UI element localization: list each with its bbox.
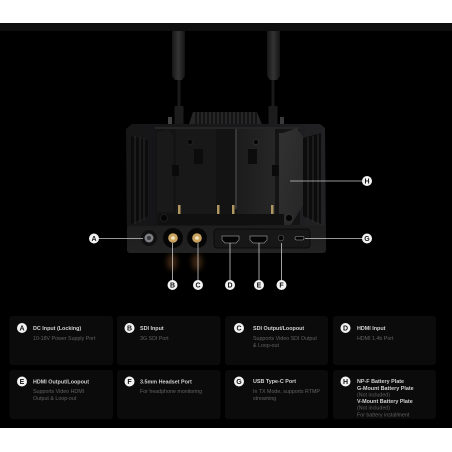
callout E: E — [257, 282, 262, 290]
panel: SDI output: Supports Video SDI Output — [253, 336, 317, 342]
panel: SDI input — [117, 316, 220, 365]
panel: DC input: DC Input (Locking) — [33, 326, 81, 332]
reflection below device — [167, 254, 202, 270]
port panel — [214, 229, 310, 248]
panel: SDI output: & Loop-out — [253, 343, 279, 349]
callout F — [276, 280, 286, 290]
callout G — [362, 234, 372, 244]
gold pins — [178, 205, 274, 214]
callout B: B — [170, 282, 175, 290]
callout D: D — [227, 282, 233, 290]
headset port F — [278, 235, 284, 241]
panel: USB-C port: G — [236, 379, 242, 386]
battery plate — [155, 127, 303, 225]
panel: HDMI input: D — [343, 326, 348, 332]
panel: SDI output: SDI Output/Loopout — [253, 326, 304, 332]
heat sink top — [188, 112, 263, 127]
callouts — [89, 176, 372, 290]
callout C: C — [195, 282, 201, 290]
panel: HDMI input — [333, 316, 436, 365]
icon: left antenna — [172, 31, 185, 126]
panel: headset port: 3.5mm Headset Port — [140, 380, 192, 386]
HDMI port D — [222, 236, 239, 243]
panel: HDMI output: Supports Video HDMI — [33, 389, 84, 395]
panel: HDMI input: HDMI Input — [357, 326, 386, 332]
panel: HDMI output: HDMI Output/Loopout — [33, 380, 89, 386]
panel: SDI input: 3G SDI Port — [140, 336, 169, 342]
callout H: H — [364, 178, 370, 186]
panel: USB-C port: streaming — [253, 396, 276, 402]
DC input port — [141, 230, 157, 246]
panel: SDI input: B — [127, 326, 132, 332]
USB-C port G — [295, 236, 304, 240]
callout H — [362, 176, 372, 186]
icon: right antenna — [267, 31, 280, 126]
device product photo — [126, 31, 326, 270]
side vents — [131, 133, 321, 224]
callout E — [254, 280, 264, 290]
panel: headset port: For headphone monitoring — [140, 389, 202, 395]
callout A: A — [91, 236, 97, 243]
panel: HDMI output — [10, 370, 113, 419]
panel: battery plate: (Not included) — [357, 392, 390, 398]
panel: headset port — [117, 370, 220, 419]
panel: SDI input: SDI Input — [140, 326, 164, 332]
panel: HDMI output: Output & Loop-out — [33, 396, 77, 402]
panel: battery plate: H — [343, 379, 348, 386]
panel: battery plate — [333, 370, 436, 419]
panel: battery plate: NP-F Battery Plate — [357, 379, 404, 385]
panel: SDI output: C — [236, 326, 242, 332]
callout G: G — [364, 236, 370, 243]
bottom port strip — [127, 226, 326, 253]
panel: DC input: 10-18V Power Supply Port — [33, 336, 96, 342]
callout A — [89, 234, 99, 244]
side knobs — [168, 117, 172, 125]
SDI port C — [187, 228, 207, 248]
device body — [126, 124, 326, 253]
panel: DC input: A — [19, 326, 25, 332]
callout D — [225, 280, 235, 290]
panel: battery plate: For battery installment — [357, 412, 410, 418]
callout C — [193, 280, 203, 290]
top band — [0, 23, 452, 31]
panel: USB-C port — [225, 370, 328, 419]
panel: DC input — [10, 316, 113, 365]
callout F: F — [279, 282, 284, 290]
panel: HDMI output: E — [20, 379, 25, 386]
panel: battery plate: G-Mount Battery Plate — [357, 386, 414, 392]
panel: USB-C port: USB Type-C Port — [253, 379, 296, 385]
panel: USB-C port: In TX Mode, supports RTMP — [253, 389, 320, 395]
panel: headset port: F — [127, 379, 132, 386]
panel: battery plate: (Not included) — [357, 406, 390, 412]
callout B — [168, 280, 178, 290]
HDMI port E — [250, 236, 267, 243]
panel: SDI output — [225, 316, 328, 365]
SDI port B — [163, 228, 183, 248]
panel: HDMI input: HDMI 1.4b Port — [357, 336, 394, 342]
panel: battery plate: V-Mount Battery Plate — [357, 399, 413, 405]
